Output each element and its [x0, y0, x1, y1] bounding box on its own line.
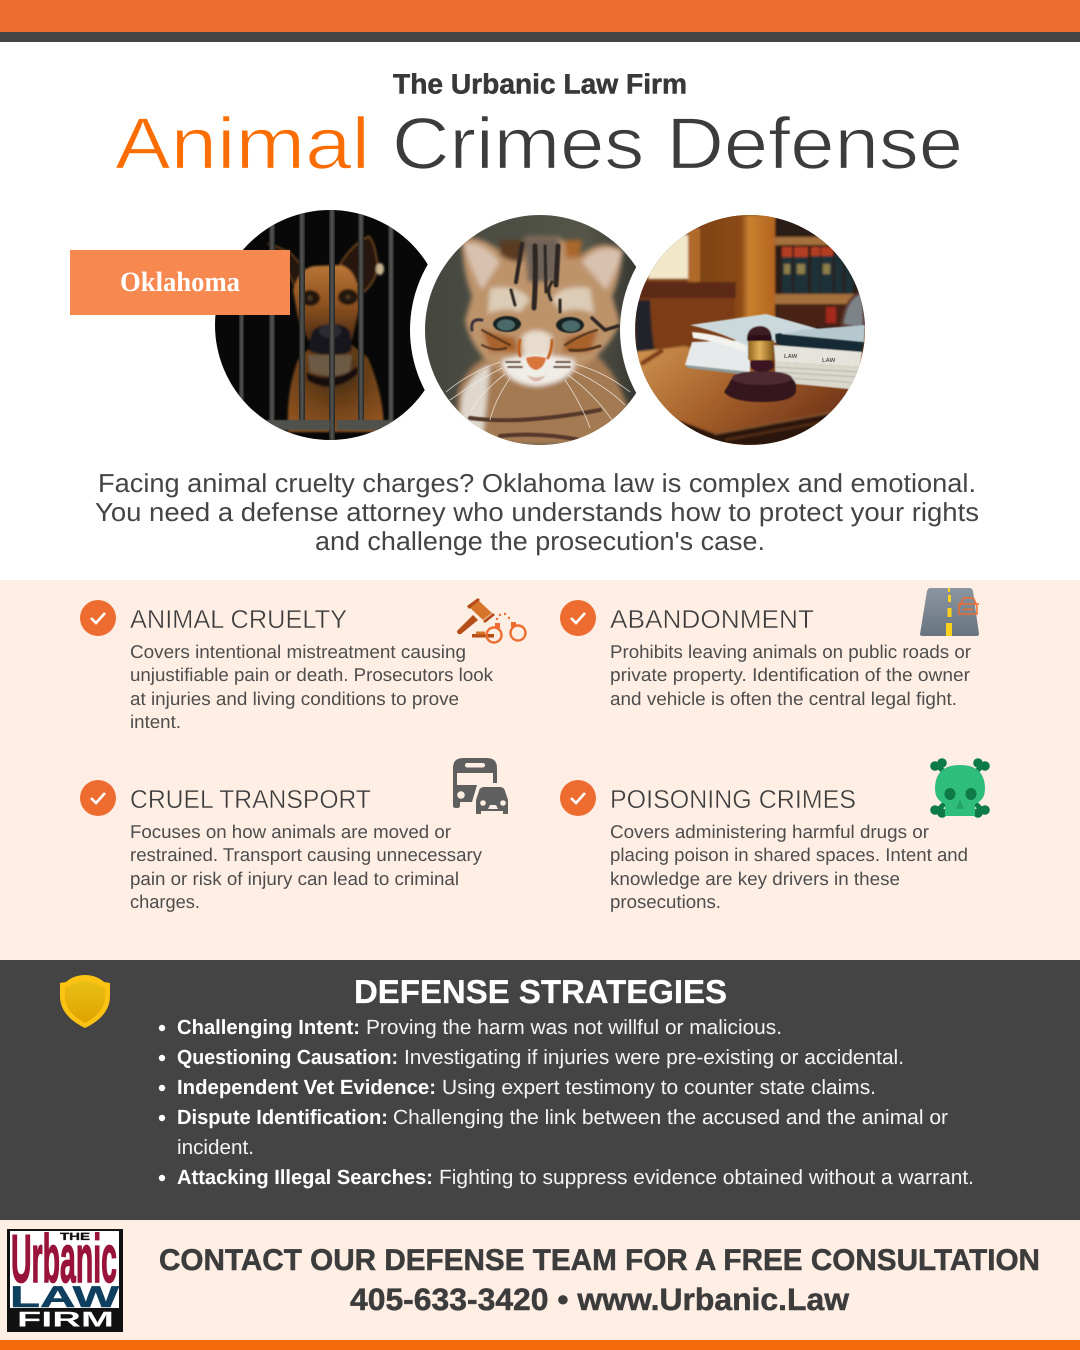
- icon: check badge: [560, 600, 596, 636]
- heading: abandonment: ABANDONMENT: [610, 604, 814, 634]
- item: abandonment: [560, 588, 979, 709]
- icon: road with car: [920, 588, 979, 636]
- photo: gavel and law books: LAW: [822, 357, 836, 364]
- white ring around gavel photo: [620, 200, 880, 460]
- panel: contact footer: [0, 1220, 1080, 1340]
- icon: check badge: [80, 600, 116, 636]
- item: animal cruelty: [80, 598, 526, 732]
- main title: Crimes Defense: [392, 103, 963, 184]
- text: animal cruelty description: at injuries and living conditions to prove: [130, 688, 459, 709]
- top dark bar: [0, 32, 1080, 42]
- text: cruel transport description: pain or risk of injury can lead to criminal: [130, 868, 459, 889]
- text: poisoning crimes description: prosecutions.: [610, 891, 721, 912]
- heading: defense strategies: DEFENSE STRATEGIES: [354, 973, 727, 1010]
- logo: The Urbanic Law Firm: FIRM: [17, 1308, 114, 1332]
- icon: bus and car: [453, 758, 508, 814]
- text: animal cruelty description: Covers intentional mistreatment causing: [130, 641, 466, 662]
- list: strategies: incident.: [177, 1136, 254, 1159]
- photo: dog behind bars: [215, 210, 445, 440]
- logo: The Urbanic Law Firm: [7, 1221, 123, 1332]
- item: poisoning crimes: [560, 758, 990, 912]
- call to action: CONTACT OUR DEFENSE TEAM FOR A FREE CONSULTATION: [159, 1244, 1040, 1277]
- state badge: Oklahoma: [70, 250, 290, 315]
- logo: The Urbanic Law Firm: THE: [60, 1231, 90, 1243]
- icon: green skull: [930, 758, 990, 818]
- list: strategies: Investigating if injuries were pre-existing or accidental.: [404, 1046, 904, 1069]
- text: animal cruelty description: unjustifiable pain or death. Prosecutors look: [130, 664, 494, 685]
- heading: poisoning crimes: POISONING CRIMES: [610, 784, 856, 814]
- icon: gavel and handcuffs: [457, 598, 526, 642]
- panel: contact footer: Urbanic: [11, 1221, 117, 1297]
- list: strategies: Attacking Illegal Searches:: [177, 1166, 433, 1189]
- list: strategies: Independent Vet Evidence:: [177, 1076, 436, 1099]
- intro paragraph: and challenge the prosecution's case.: [315, 526, 765, 556]
- text: cruel transport description: Focuses on how animals are moved or: [130, 821, 451, 842]
- text: animal cruelty description: intent.: [130, 711, 181, 732]
- text: animal cruelty description: [130, 641, 494, 732]
- photo: gavel and law books: LAW: [784, 353, 798, 360]
- list: strategies: Questioning Causation:: [177, 1046, 398, 1069]
- text: abandonment description: private property. Identification of the owner: [610, 664, 970, 685]
- text: cruel transport description: [130, 821, 483, 912]
- bottom orange bar: [0, 1340, 1080, 1350]
- photo: gavel and law books: [635, 215, 870, 445]
- intro paragraph: [95, 468, 979, 556]
- text: poisoning crimes description: knowledge are key drivers in these: [610, 868, 900, 889]
- text: abandonment description: [610, 641, 971, 709]
- intro paragraph: You need a defense attorney who understands how to protect your rights: [95, 497, 979, 527]
- contact details: 405-633-3420 • www.Urbanic.Law: [350, 1282, 850, 1317]
- list: strategies: Challenging the link between the accused and the animal or: [393, 1106, 948, 1129]
- icon: yellow shield: [60, 975, 110, 1028]
- heading: cruel transport: CRUEL TRANSPORT: [130, 784, 371, 814]
- icon: check badge: [80, 780, 116, 816]
- photo: tabby cat: [425, 215, 655, 445]
- list: strategies: Dispute Identification:: [177, 1106, 388, 1129]
- intro paragraph: Facing animal cruelty charges? Oklahoma law is complex and emotional.: [98, 468, 976, 498]
- state badge: Oklahoma: Oklahoma: [120, 267, 240, 298]
- panel: defense strategies: [0, 960, 1080, 1220]
- text: abandonment description: Prohibits leaving animals on public roads or: [610, 641, 971, 662]
- item: cruel transport: [80, 758, 508, 912]
- icon: check badge: [560, 780, 596, 816]
- top orange bar: [0, 0, 1080, 32]
- heading: animal cruelty: ANIMAL CRUELTY: [130, 604, 347, 634]
- firm name heading: The Urbanic Law Firm: [393, 68, 687, 100]
- white ring around cat photo: [410, 200, 670, 460]
- list: strategies: Fighting to suppress evidence obtained without a warrant.: [439, 1166, 974, 1189]
- list: strategies: Proving the harm was not willful or malicious.: [366, 1016, 782, 1039]
- text: poisoning crimes description: [610, 821, 968, 912]
- text: poisoning crimes description: placing poison in shared spaces. Intent and: [610, 844, 968, 865]
- list: strategies: Challenging Intent:: [177, 1016, 360, 1039]
- panel: crime types: [0, 580, 1080, 960]
- text: abandonment description: and vehicle is often the central legal fight.: [610, 688, 957, 709]
- text: cruel transport description: restrained. Transport causing unnecessary: [130, 844, 483, 865]
- text: cruel transport description: charges.: [130, 891, 200, 912]
- text: poisoning crimes description: Covers administering harmful drugs or: [610, 821, 929, 842]
- list: strategies: Using expert testimony to counter state claims.: [442, 1076, 876, 1099]
- logo: The Urbanic Law Firm: LAW: [10, 1281, 120, 1314]
- main title: [115, 103, 963, 184]
- list: strategies: [159, 1016, 974, 1189]
- main title: Animal: [115, 103, 370, 184]
